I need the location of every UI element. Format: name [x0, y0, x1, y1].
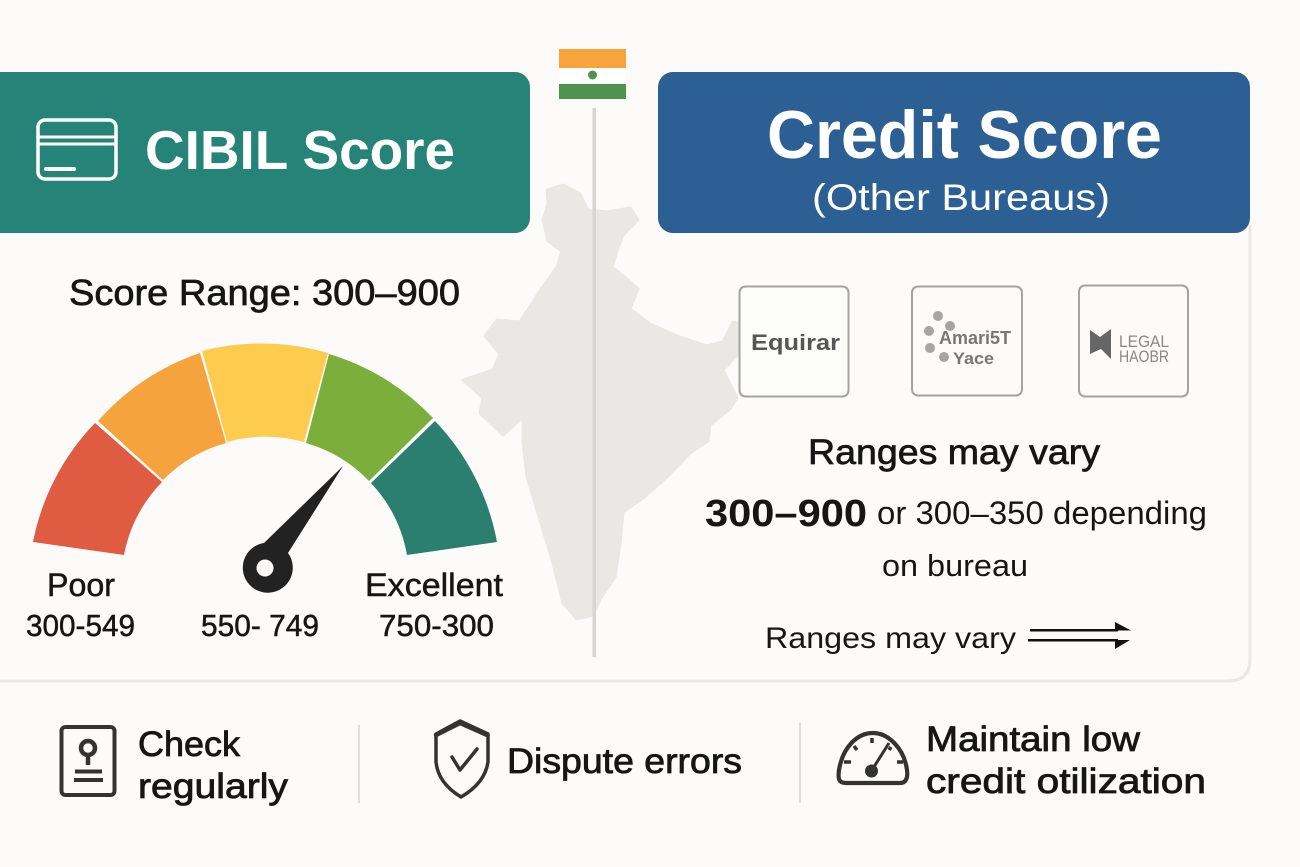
bureau logo: Amari5T Yace: Yace [953, 349, 994, 368]
bureau logo: Legal Haobr: HAOBR [1119, 347, 1169, 366]
text: ranges may vary heading: Ranges may vary [808, 433, 1101, 472]
gauge segment: yellow [202, 343, 328, 442]
text: maintain low credit otilization: Maintain low [926, 720, 1141, 759]
text: maintain low credit otilization [926, 720, 1206, 801]
tip: check regularly [62, 725, 289, 806]
gauge label: Poor: Poor [47, 567, 115, 603]
tip: dispute errors [436, 721, 742, 797]
text: range detail [705, 493, 1207, 583]
gauge segment: orange [98, 353, 226, 480]
text: ranges note: Ranges may vary [765, 622, 1016, 655]
text: range detail: or 300–350 depending [877, 495, 1207, 531]
bureau logo: Amari5T Yace: Amari5T [939, 328, 1011, 348]
tip: maintain low credit utilization [839, 720, 1206, 801]
divider [358, 725, 360, 803]
text: score range: Score Range: 300–900 [69, 272, 460, 313]
background map of India [463, 185, 740, 619]
gauge label: Excellent [365, 567, 503, 643]
gauge label: Excellent: 750-300 [379, 608, 494, 643]
gauge chart [33, 343, 497, 593]
icon: shield with check [436, 721, 488, 797]
icon: India flag [559, 49, 626, 99]
heading: CIBIL Score: CIBIL Score [145, 119, 455, 181]
bureau logo: Equirar [740, 286, 848, 396]
icon: credit card [38, 120, 116, 179]
text: maintain low credit otilization: credit otilization [926, 762, 1206, 801]
bureau logo: Amari5T Yace [912, 286, 1022, 396]
text: dispute errors: Dispute errors [507, 742, 742, 781]
gauge label: Excellent: Excellent [365, 567, 503, 603]
gauge segment: light green [306, 354, 433, 481]
subheading: Other Bureaus: (Other Bureaus) [812, 177, 1110, 218]
gauge label: Poor: 300-549 [26, 608, 135, 643]
panel: comparison frame [0, 225, 1250, 681]
gauge segment: red [33, 423, 162, 555]
gauge needle [243, 466, 343, 593]
bureau logo: Equirar: Equirar [751, 330, 840, 355]
divider [799, 723, 801, 803]
center divider [592, 108, 596, 657]
bureau logo: Legal Haobr [1079, 286, 1188, 396]
gauge label: Poor [26, 567, 135, 643]
icon: document with key [62, 727, 114, 795]
icon: speedometer [839, 733, 907, 783]
text: range detail: on bureau [882, 548, 1028, 583]
gauge label: middle range: 550- 749 [201, 608, 319, 643]
panel: Credit Score header [658, 72, 1250, 233]
arrow: double arrow [1028, 622, 1131, 649]
heading: Credit Score: Credit Score [767, 97, 1162, 173]
text: check regularly: regularly [138, 767, 289, 806]
text: check regularly: Check [138, 725, 241, 764]
gauge segment: teal [371, 421, 497, 555]
text: check regularly [138, 725, 289, 806]
text: range detail: 300–900 [705, 493, 867, 535]
panel: CIBIL Score header [0, 72, 530, 233]
bureau logo: Legal Haobr: LEGAL [1119, 332, 1169, 351]
